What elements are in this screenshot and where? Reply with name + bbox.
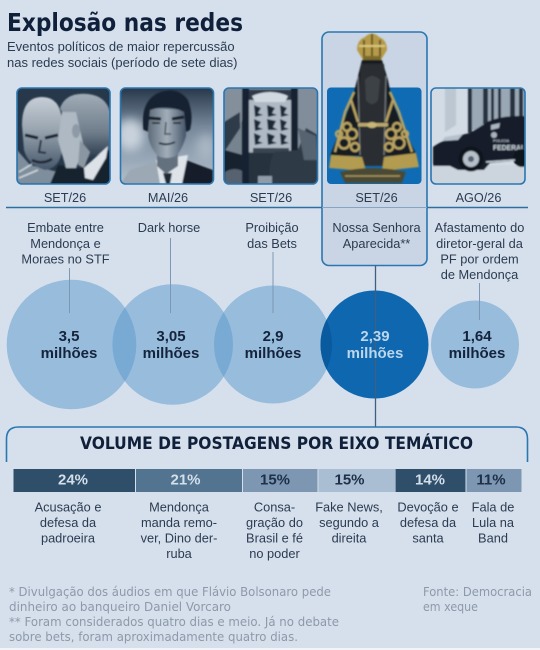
theme labels: [35, 500, 515, 561]
value: 3,05: 3,05: [156, 328, 186, 345]
highlighted panel: Nossa Senhora Aparecida: [322, 32, 427, 266]
bubble chart: [7, 280, 519, 409]
value: 3,5: milhões: [41, 345, 97, 362]
value: 2,39: 2,39: [360, 328, 390, 345]
theme: Devoção: santa: [412, 530, 445, 546]
photo: Proibição das Bets: [224, 88, 318, 184]
central robe: [358, 64, 388, 166]
label: Afastamento: diretor-geral da: [436, 236, 524, 251]
date labels: SET/26: [44, 191, 86, 205]
bubble values: [41, 328, 505, 362]
theme: Devoção: defesa da: [400, 515, 457, 530]
date labels: [44, 191, 501, 205]
segment: 11%: 11%: [476, 472, 506, 488]
connector to theme panel: [374, 266, 376, 427]
footnotes: [9, 584, 339, 644]
theme heading: VOLUME DE POSTAGENS POR EIXO TEMÁTICO: [80, 434, 473, 453]
value: 2,9: 2,9: [263, 328, 283, 345]
date labels: SET/26: [355, 191, 398, 205]
label: Nossa Senhora: Aparecida**: [343, 236, 410, 251]
title: Explosão nas redes: [7, 8, 243, 37]
segment: 15% fake news: 15%: [334, 472, 365, 488]
footnotes: sobre bets, foram aproximadamente quatro dias.: [9, 629, 298, 644]
value: 3,05: milhões: [143, 345, 199, 362]
segment: 15% consagração: [243, 469, 318, 492]
theme: Fake News: direita: [332, 530, 367, 546]
stacked percentage bar: [14, 469, 522, 492]
bubble: 2,9 milhões: [214, 286, 332, 404]
label: Proibição: das Bets: [247, 236, 297, 251]
golden embroidery: [335, 92, 412, 152]
segment: 15% consagração: 15%: [260, 472, 290, 488]
footnotes: ** Foram considerados quatro dias e meio. Já no debate: [9, 614, 339, 629]
segment: 15% fake news: [318, 469, 395, 492]
label: Dark horse: Dark horse: [138, 220, 200, 235]
segment: 21%: [136, 469, 242, 492]
date labels: SET/26: [250, 191, 292, 205]
subtitle: nas redes sociais (período de sete dias): [7, 55, 238, 70]
source: Fonte: Democracia: [423, 584, 532, 599]
label: Afastamento: PF por ordem: [440, 252, 519, 266]
theme panel frame: [6, 427, 528, 462]
segment: 14%: [396, 469, 466, 492]
theme: Fala de Lula: Fala de: [472, 500, 514, 514]
footnotes: * Divulgação dos áudios em que Flávio Bolsonaro pede: [9, 584, 331, 599]
photo: Mendonça e Moraes: [17, 88, 110, 184]
source: em xeque: [423, 599, 478, 614]
bubble overlap: [320, 320, 332, 369]
segment: 21%: 21%: [170, 472, 201, 488]
bubble: 2,39 milhões: [320, 290, 428, 398]
value: 3,5: 3,5: [59, 328, 79, 345]
theme: Fala de Lula: Band: [478, 530, 508, 546]
photo: Polícia Federal: [431, 88, 531, 184]
fringe: [329, 155, 366, 171]
bubble: 3,05 milhões: [112, 284, 233, 405]
theme: Mendonça: Mendonça: [149, 500, 210, 514]
theme: Consagração: no poder: [249, 546, 300, 561]
base: [340, 168, 406, 183]
leader lines: [70, 238, 480, 320]
bottom edge: [0, 648, 540, 650]
label: Proibição: Proibição: [245, 220, 299, 235]
bubble: 1,64 milhões: [431, 300, 519, 388]
theme: Fake News: segundo a: [319, 515, 380, 530]
event labels: [21, 220, 524, 282]
label: Embate: Mendonça e: [30, 236, 101, 251]
photo: imagem de Nossa Senhora Aparecida: [327, 34, 422, 184]
theme: padroeira: defesa da: [40, 515, 97, 530]
segment: 24%: 24%: [58, 472, 88, 488]
footnotes: dinheiro ao banqueiro Daniel Vorcaro: [9, 599, 231, 614]
value: 1,64: 1,64: [462, 328, 492, 345]
label: Afastamento: Afastamento do: [435, 220, 524, 235]
bubble: 3,5 milhões: [7, 280, 136, 409]
theme: Consagração: Brasil e fé: [246, 530, 303, 546]
segment: 24%: [14, 469, 135, 492]
value: 2,9: milhões: [245, 345, 301, 362]
theme: Fake News: Fake News,: [315, 500, 383, 514]
theme: Fala de Lula: Lula na: [472, 515, 515, 530]
value: 1,64: milhões: [449, 345, 505, 362]
theme: padroeira: padroeira: [41, 530, 96, 546]
photo: Polícia Federal: FEDERAL: [493, 145, 526, 152]
label: Nossa Senhora: Nossa Senhora: [332, 220, 421, 235]
photo: Polícia Federal: POLICIA: [493, 138, 509, 143]
label: Embate: Embate entre: [27, 220, 104, 235]
theme: Consagração: Consa-: [254, 500, 295, 514]
theme: Consagração: gração do: [246, 515, 303, 530]
value: 2,39: milhões: [347, 345, 403, 362]
segment: 11%: [466, 469, 522, 492]
photo: Dark horse: [116, 88, 216, 184]
theme: Mendonça: ver, Dino der-: [141, 530, 217, 546]
segment: 14%: 14%: [415, 472, 445, 488]
date labels: AGO/26: [456, 191, 501, 205]
divider rule: [6, 206, 528, 208]
crown: [357, 34, 387, 61]
label: Afastamento: de Mendonça: [441, 267, 519, 282]
mantle: [330, 60, 417, 156]
theme: padroeira: Acusação e: [35, 500, 101, 514]
theme: Mendonça: manda remo-: [141, 515, 217, 530]
theme: Mendonça: ruba: [166, 546, 193, 561]
source: [423, 584, 532, 614]
date labels: MAI/26: [148, 191, 188, 205]
subtitle: Eventos políticos de maior repercussão: [7, 39, 235, 54]
label: Embate: Moraes no STF: [21, 252, 110, 266]
theme: Devoção: Devoção e: [397, 500, 459, 514]
